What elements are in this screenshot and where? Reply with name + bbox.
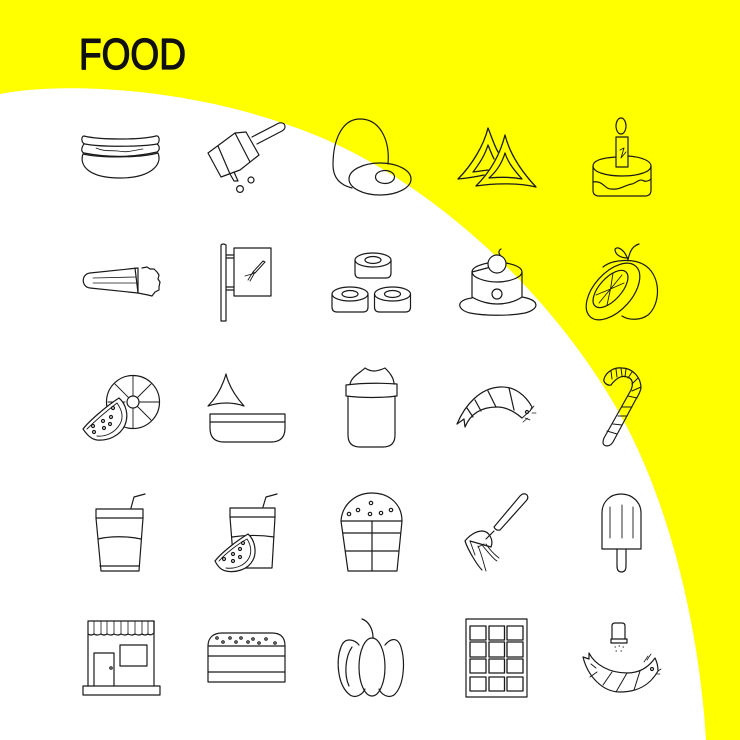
icon: hot dog bbox=[82, 136, 159, 178]
icon: chocolate bar bbox=[466, 619, 527, 697]
icon: orange wheel and melon slice bbox=[83, 376, 160, 440]
icon: jar with lid bbox=[346, 368, 397, 447]
icon: samosa and bowl bbox=[208, 374, 285, 442]
icon: carving fork bbox=[465, 494, 528, 571]
icon: shrimp bbox=[457, 387, 536, 427]
icon: shop bbox=[83, 621, 160, 695]
icon: cake pop on stick bbox=[208, 123, 285, 192]
icon: popsicle bbox=[602, 494, 641, 572]
icon: cannoli bbox=[83, 267, 160, 296]
icon: samosas bbox=[458, 128, 536, 187]
icon: cup with melon slice bbox=[215, 494, 277, 572]
icon: birthday cake with candle bbox=[593, 118, 651, 196]
icon: drink cup bbox=[96, 494, 145, 571]
icon: muffin bbox=[341, 493, 402, 571]
icon: orange half bbox=[576, 244, 658, 329]
icon: salt shaker and shrimp bbox=[583, 623, 661, 692]
icon grid bbox=[82, 118, 661, 697]
icon: loaf cake bbox=[208, 633, 285, 682]
icon: cherry cake on plate bbox=[460, 249, 536, 315]
icon: pumpkin bbox=[338, 619, 403, 696]
icon: egg and fried egg bbox=[333, 119, 411, 195]
icon: restaurant sign bbox=[221, 244, 271, 321]
title: FOOD bbox=[79, 30, 186, 79]
icon: candy cane bbox=[603, 368, 641, 446]
icon: sushi rolls bbox=[332, 253, 410, 312]
